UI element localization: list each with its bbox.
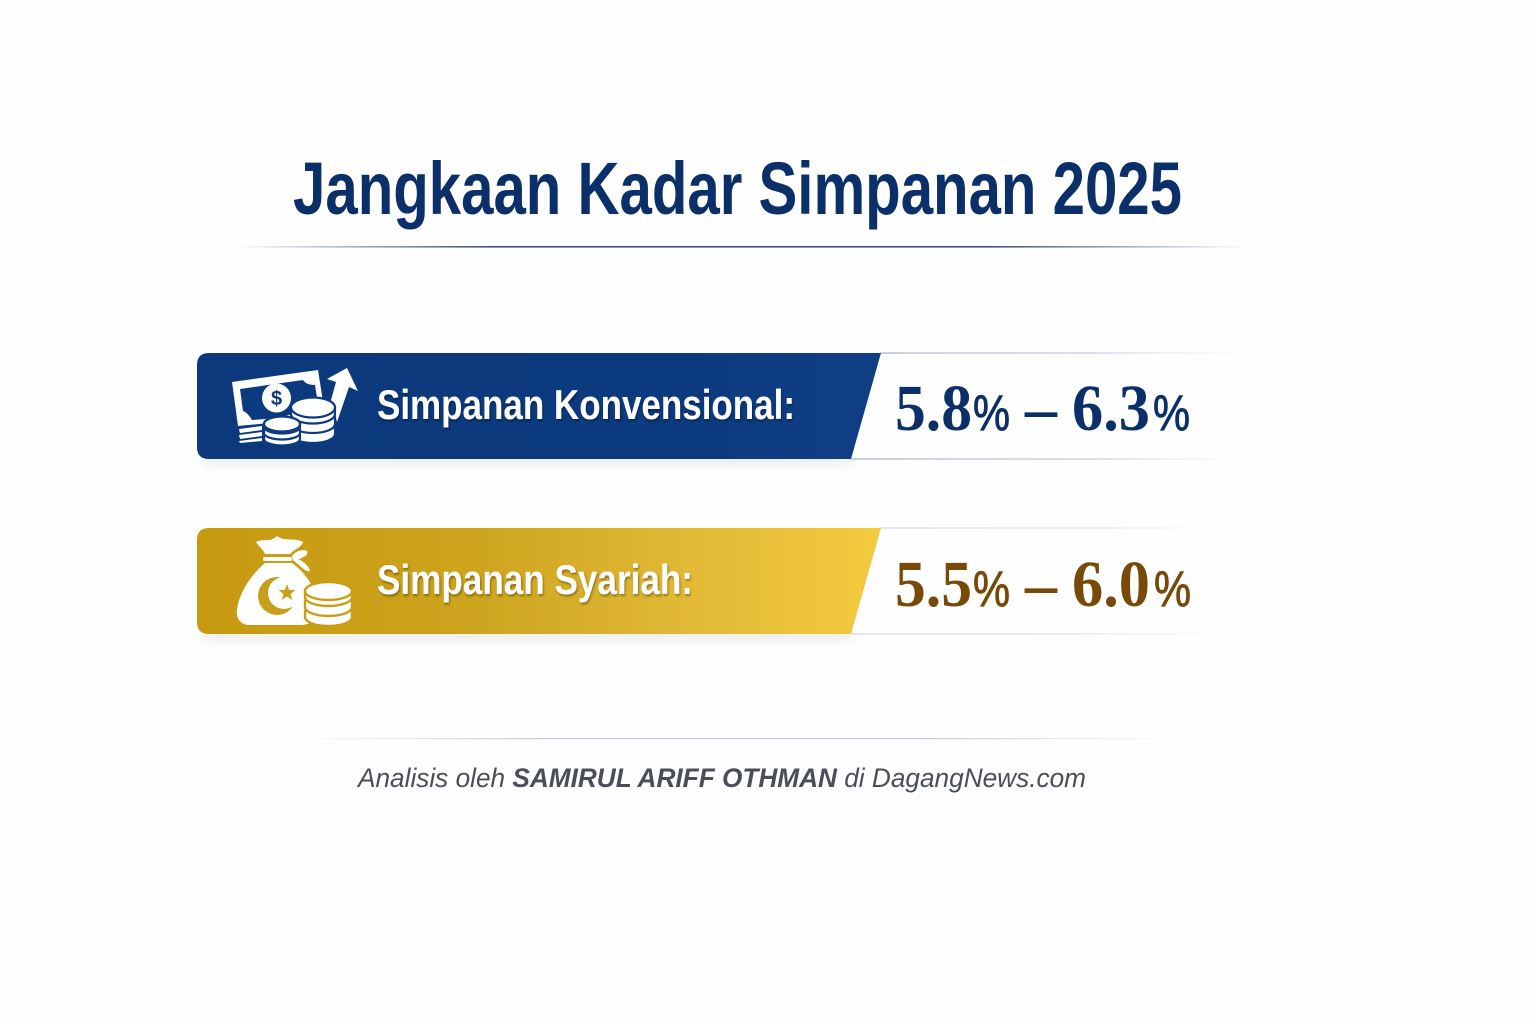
panel: simpanan konvensional bbox=[197, 353, 1255, 464]
value: syariah: % bbox=[1154, 561, 1191, 617]
value: konvensional: % bbox=[973, 385, 1010, 441]
icon: banknote, coins and rising arrow bbox=[232, 368, 358, 445]
bar: syariah bbox=[197, 528, 881, 634]
value: syariah: % bbox=[973, 561, 1010, 617]
label: syariah: Simpanan Syariah: bbox=[377, 556, 693, 603]
icon: banknote, coins and rising arrow: $ bbox=[271, 388, 282, 410]
value: syariah: 6.0 bbox=[1072, 548, 1150, 621]
footer credit: Analisis oleh SAMIRUL ARIFF OTHMAN di DagangNews.com bbox=[356, 763, 1086, 793]
value: syariah: 5.5 bbox=[895, 548, 972, 621]
panel: simpanan syariah bbox=[197, 528, 1255, 639]
value: konvensional: % bbox=[1153, 385, 1190, 441]
value: konvensional: 6.3 bbox=[1072, 372, 1150, 445]
value: konvensional: – bbox=[1024, 372, 1058, 445]
title: Jangkaan Kadar Simpanan 2025 bbox=[293, 147, 1182, 230]
icon: money bag with crescent and coins bbox=[237, 536, 352, 626]
value: syariah: – bbox=[1024, 548, 1058, 621]
bar: konvensional bbox=[197, 353, 881, 459]
label: konvensional: Simpanan Konvensional: bbox=[377, 381, 795, 428]
value: konvensional: 5.8 bbox=[895, 372, 972, 445]
